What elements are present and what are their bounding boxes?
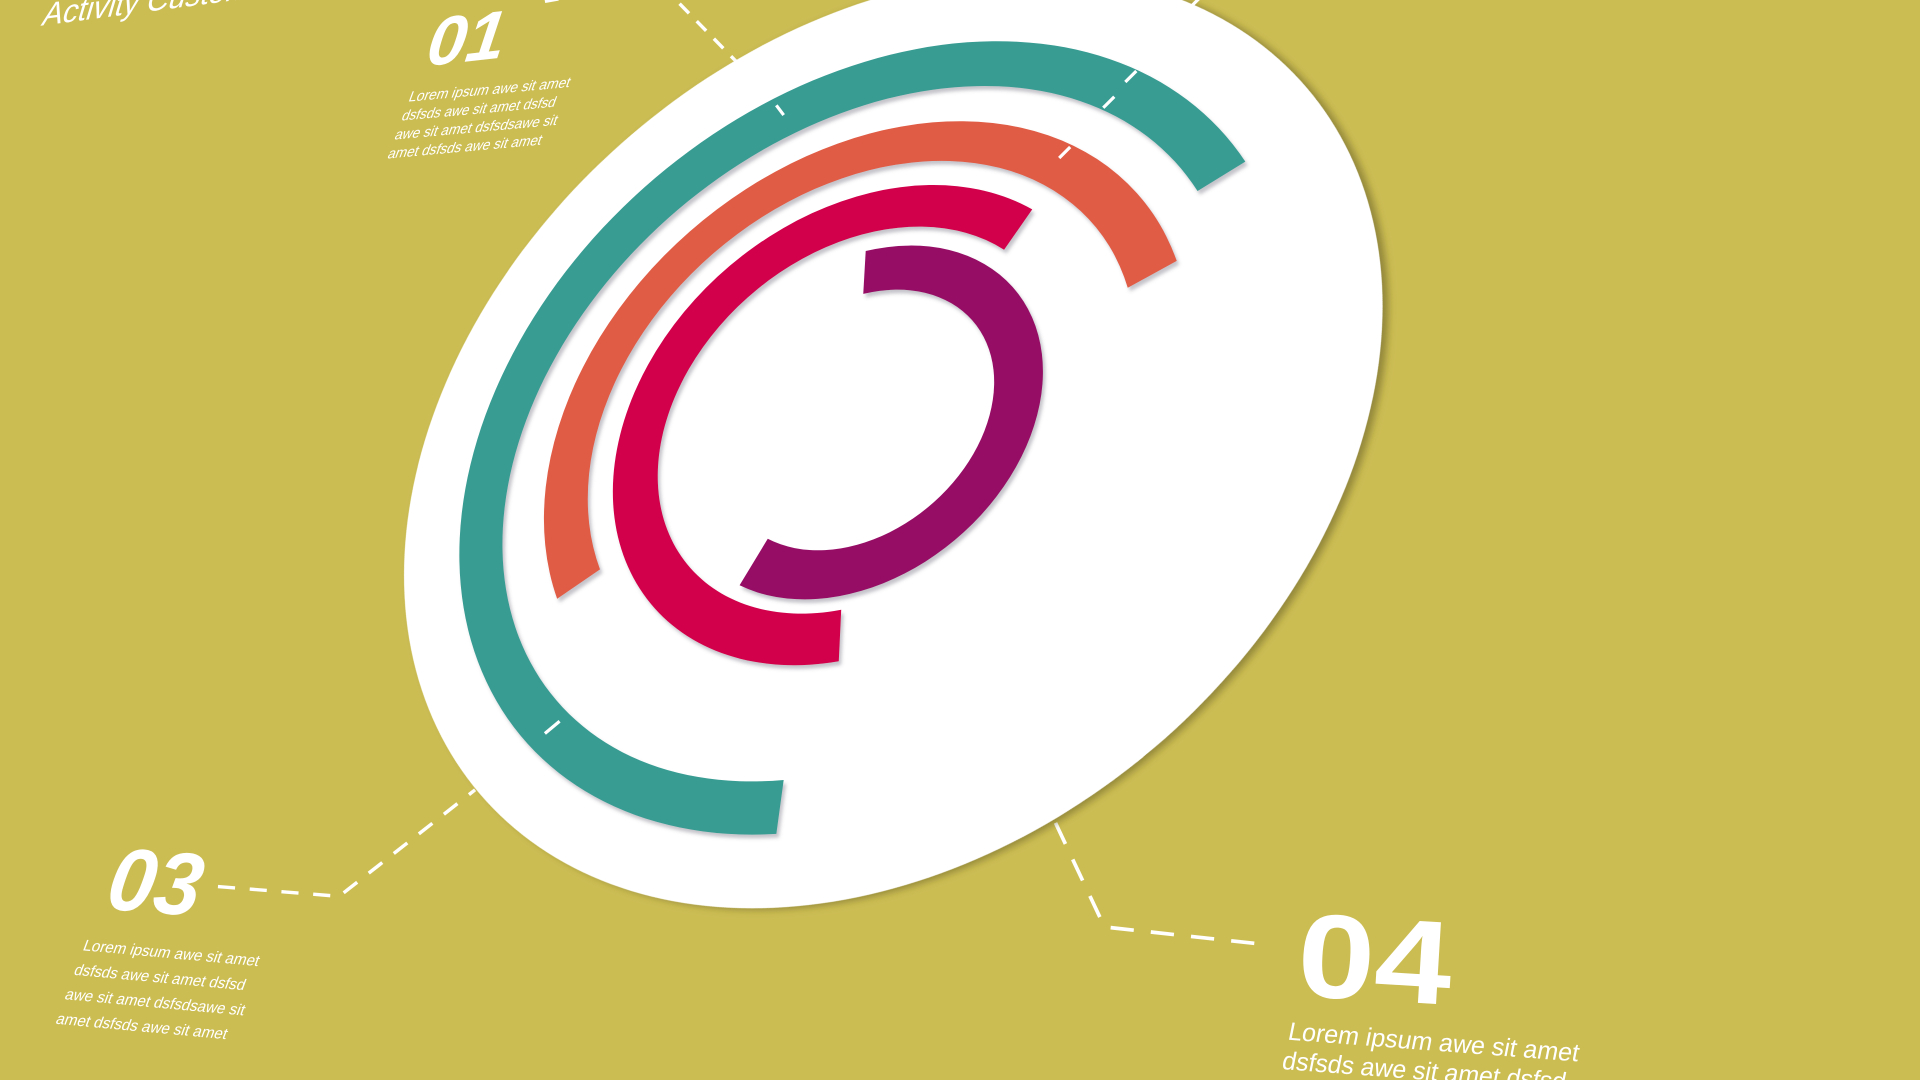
number 04: 04 <box>1294 889 1456 1031</box>
arc: teal outer ring <box>459 41 1245 835</box>
text block 04: Lorem ipsum awe sit amet <box>1286 1018 1582 1067</box>
text block 03: Lorem ipsum awe sit amet <box>81 938 263 970</box>
text block 01 <box>385 74 575 162</box>
connector: dashed line to 03 <box>218 790 475 896</box>
text block 01: amet dsfsds awe sit amet <box>385 132 546 162</box>
top-right tick <box>1190 0 1200 7</box>
arc: orange ring <box>544 121 1177 599</box>
connector: dashed line to 01 <box>680 4 738 64</box>
white perspective disc <box>218 0 1568 1080</box>
text block 01: awe sit amet dsfsdsawe sit <box>392 112 561 143</box>
text block 01: dsfsds awe sit amet dsfsd <box>399 94 559 124</box>
text block 03: awe sit amet dsfsdsawe sit <box>62 987 248 1019</box>
text block 03: dsfsds awe sit amet dsfsd <box>72 962 248 994</box>
arc: purple inner ring <box>740 246 1043 599</box>
arc: crimson ring <box>613 185 1032 665</box>
text block 01: Lorem ipsum awe sit amet <box>406 74 574 106</box>
text block 03 <box>53 938 266 1044</box>
tick marks on arcs <box>545 71 1136 733</box>
text block 03: amet dsfsds awe sit amet <box>53 1011 231 1043</box>
connector: dashed line to 04 <box>1056 823 1261 944</box>
top tick <box>545 0 558 1</box>
number 03: 03 <box>101 829 211 935</box>
